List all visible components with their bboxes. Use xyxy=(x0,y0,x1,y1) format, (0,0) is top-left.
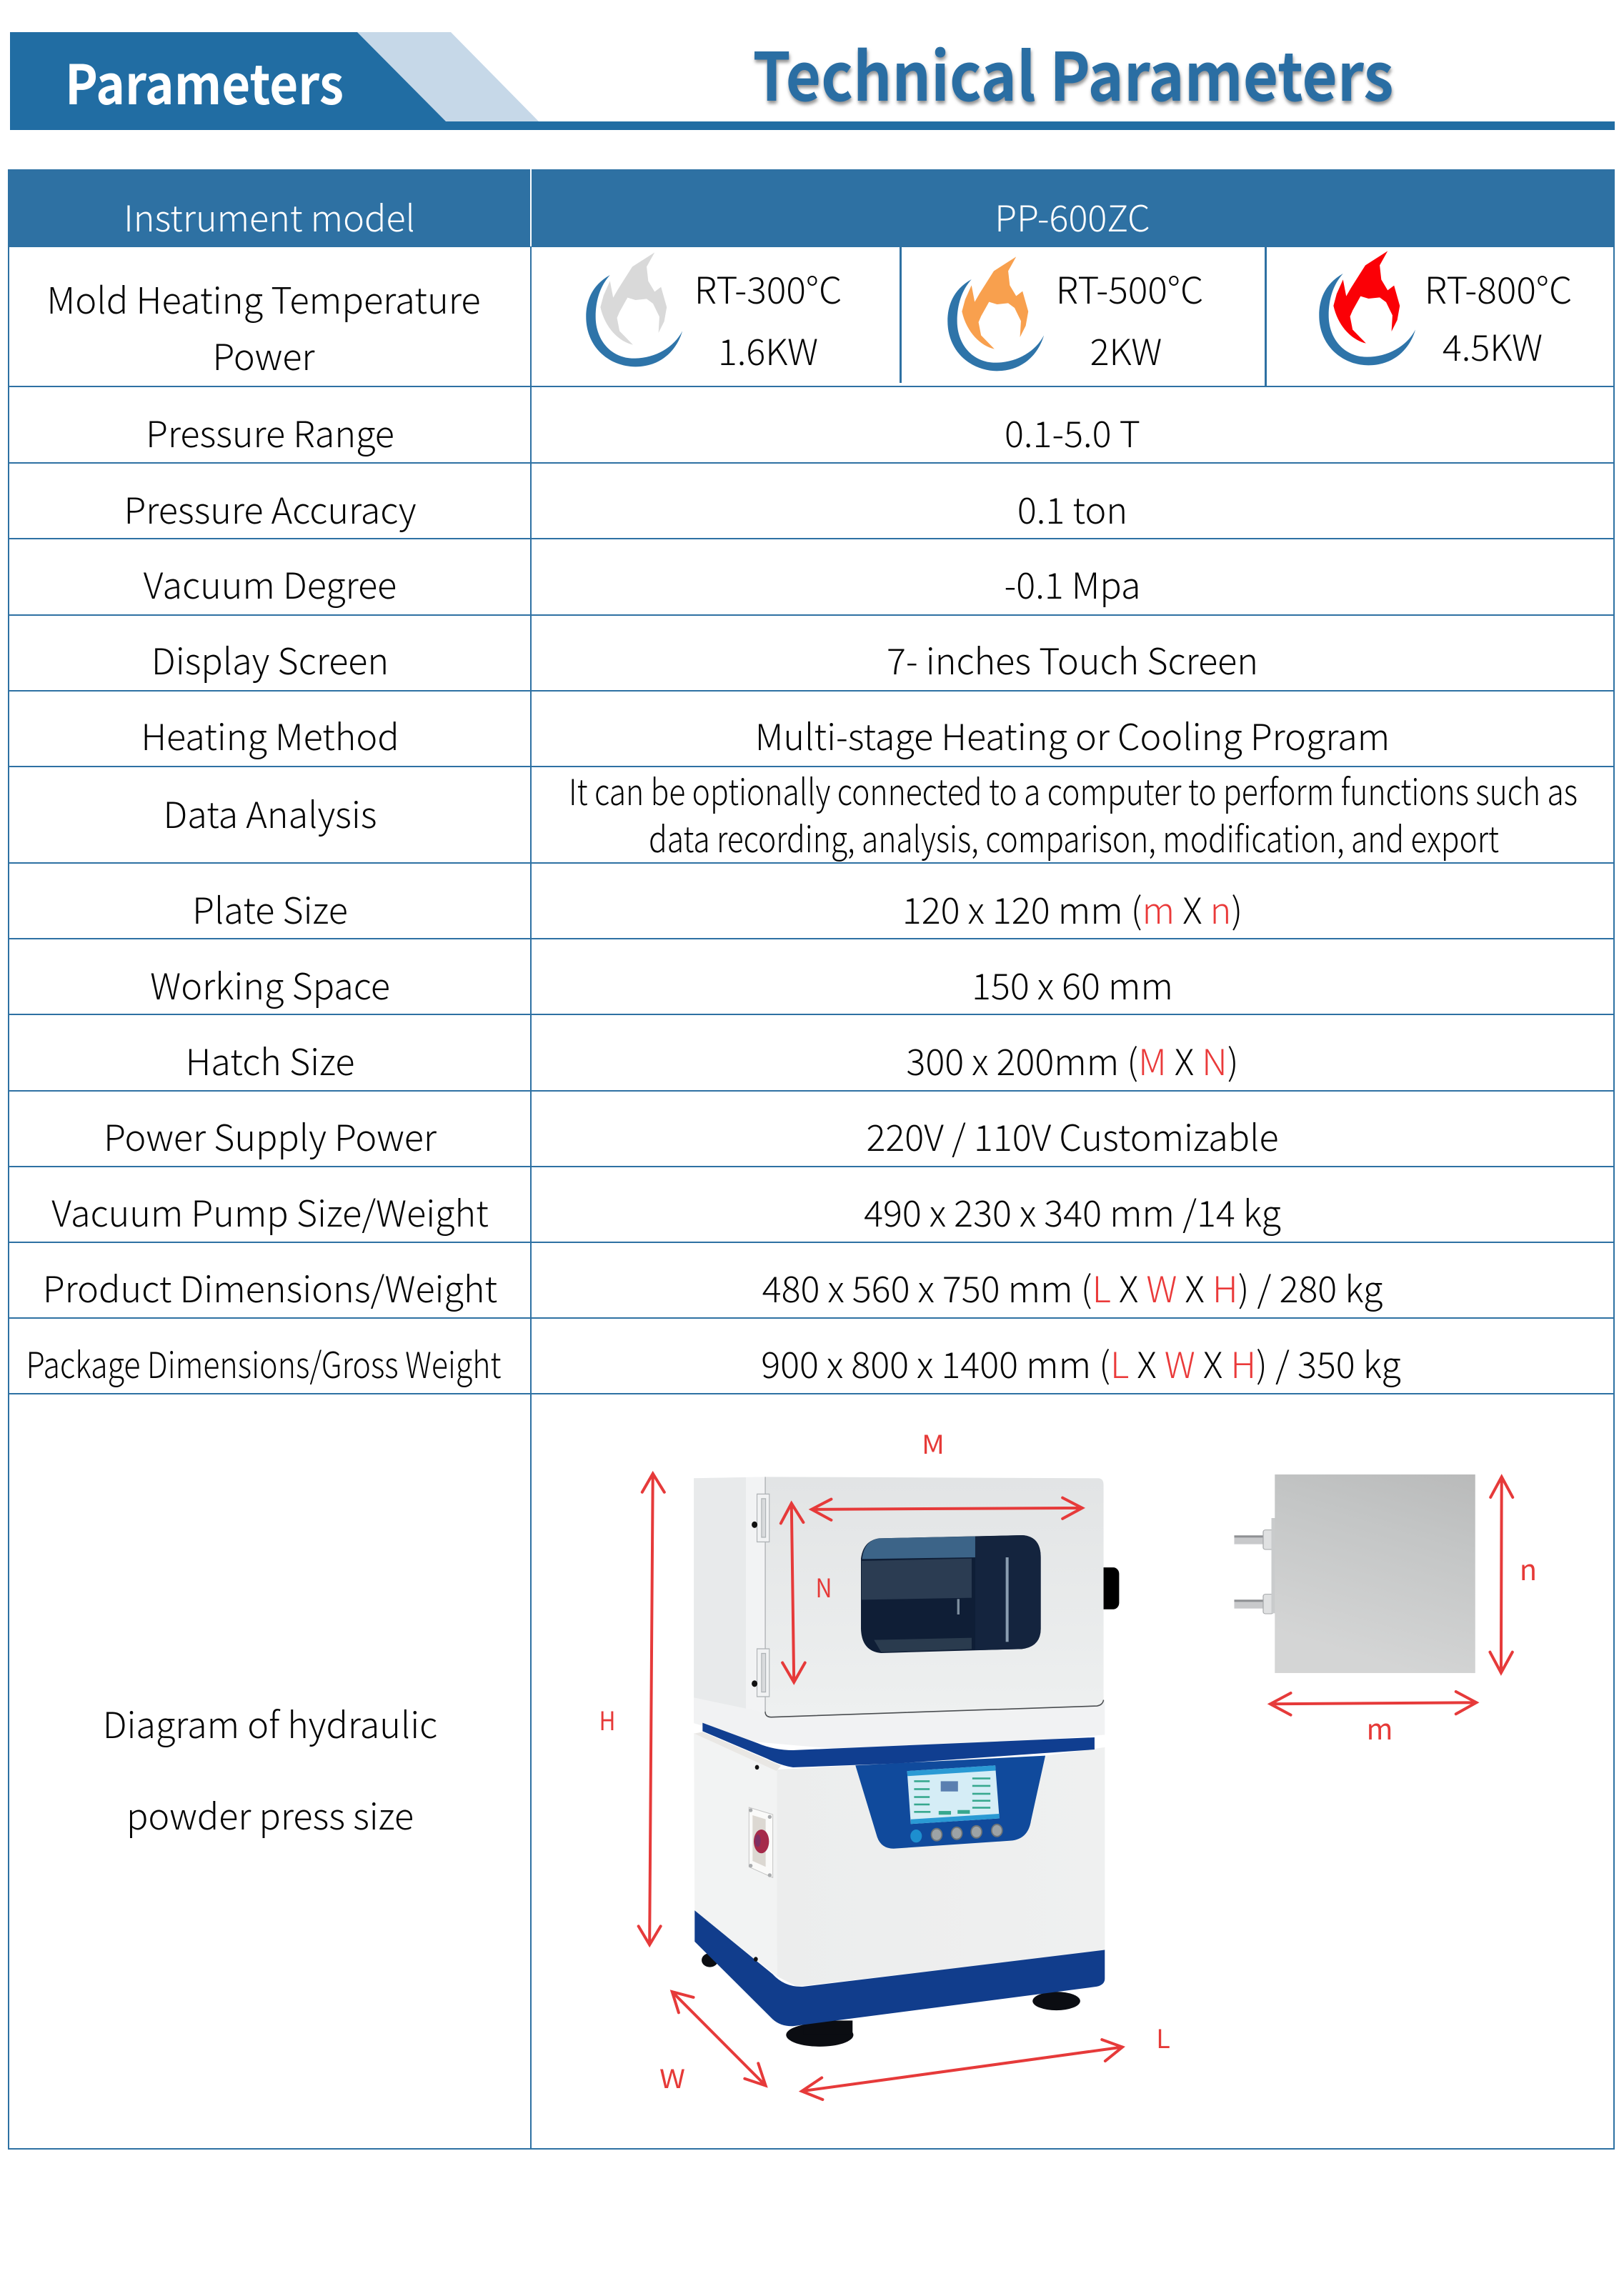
row: vacuum degree: Vacuum Degree xyxy=(144,558,397,609)
table header row: PP-600ZC xyxy=(995,191,1150,242)
arrow: M xyxy=(812,1498,1082,1520)
icon: red flame 800C xyxy=(1319,251,1415,365)
machine lower front xyxy=(777,1747,1105,1987)
row: heating method: Multi-stage Heating or Cooling Program xyxy=(755,709,1390,761)
row: data analysis: Data Analysis xyxy=(163,787,377,839)
table header row xyxy=(8,169,1615,247)
row: display screen xyxy=(151,634,1258,685)
machine handle xyxy=(1095,1567,1119,1609)
diagram: heating plate xyxy=(1234,1474,1537,1748)
row: pressure range: 0.1-5.0 T xyxy=(1005,406,1140,458)
row: working space: Working Space xyxy=(150,959,390,1010)
row: plate size xyxy=(192,883,1242,934)
row: vacuum pump size and weight: Vacuum Pump Size/Weight xyxy=(51,1186,489,1237)
row: product dimensions and weight: Product Dimensions/Weight xyxy=(43,1262,497,1313)
row: package dimensions and gross weight: 900 x 800 x 1400 mm (L X W X H) / 350 kg xyxy=(761,1337,1401,1389)
row: mold heating temperature and power: 4.5KW xyxy=(1443,320,1543,371)
row: mold heating temperature and power: RT-800°C xyxy=(1425,261,1572,314)
row: mold heating temperature and power: Mold Heating Temperature xyxy=(46,271,481,324)
row: working space: 150 x 60 mm xyxy=(972,959,1173,1010)
row: data analysis xyxy=(163,764,1578,863)
machine feet xyxy=(702,1953,1080,2047)
machine control panel xyxy=(855,1756,1045,1849)
icon: grey flame 300C xyxy=(586,252,682,366)
row: power supply power xyxy=(104,1110,1279,1162)
row: pressure accuracy xyxy=(124,483,1127,534)
row: hatch size: Hatch Size xyxy=(186,1034,354,1086)
machine window xyxy=(861,1535,1041,1653)
row: mold heating temperature and power: RT-300°C xyxy=(694,261,842,314)
row: vacuum pump size and weight xyxy=(51,1186,1281,1237)
arrow: n xyxy=(1490,1477,1513,1673)
row: hatch size xyxy=(186,1034,1239,1086)
label: n: n xyxy=(1520,1547,1537,1589)
plate fittings xyxy=(1234,1518,1275,1614)
row: vacuum degree xyxy=(144,558,1140,609)
row: product dimensions and weight xyxy=(43,1262,1383,1313)
header banner xyxy=(10,32,1615,130)
label: m: m xyxy=(1366,1707,1393,1748)
row: vacuum degree: -0.1 Mpa xyxy=(1005,558,1140,609)
row: mold heating temperature and power: Power xyxy=(213,329,315,381)
arrow: W xyxy=(672,1992,766,2085)
row: mold heating temperature and power: 2KW xyxy=(1090,324,1162,376)
label: L: L xyxy=(1156,2019,1170,2056)
label: W: W xyxy=(659,2059,685,2096)
machine blue base xyxy=(694,1910,1105,2026)
row: mold heating temperature and power: RT-500°C xyxy=(1056,261,1203,314)
row: product dimensions and weight: 480 x 560 x 750 mm (L X W X H) / 280 kg xyxy=(762,1262,1383,1313)
row: pressure accuracy: Pressure Accuracy xyxy=(124,483,417,534)
row: vacuum pump size and weight: 490 x 230 x 340 mm /14 kg xyxy=(864,1186,1281,1237)
row: display screen: 7- inches Touch Screen xyxy=(887,634,1258,685)
banner light slanted tab xyxy=(350,32,539,123)
plate body xyxy=(1275,1474,1475,1673)
row: heating method xyxy=(141,709,1390,761)
label: M: M xyxy=(922,1424,945,1462)
row: display screen: Display Screen xyxy=(151,634,389,685)
label: H: H xyxy=(599,1701,616,1738)
arrow: H xyxy=(639,1474,664,1945)
machine lower side rim xyxy=(694,1732,781,1771)
row: mold heating temperature and power: 1.6KW xyxy=(718,324,818,376)
banner dark tab xyxy=(10,32,457,130)
row label: diagram of hydraulic powder press size xyxy=(103,1697,437,1840)
title: Technical Parameters xyxy=(753,24,1393,120)
machine lower side xyxy=(694,1733,779,1977)
row: heating method: Heating Method xyxy=(141,709,399,761)
machine hinges xyxy=(757,1494,769,1697)
row: plate size: 120 x 120 mm (m X n) xyxy=(902,883,1242,934)
row: pressure accuracy: 0.1 ton xyxy=(1017,483,1127,534)
row: package dimensions and gross weight xyxy=(26,1337,1401,1389)
banner heading: Parameters xyxy=(65,41,344,120)
row: working space xyxy=(150,959,1173,1010)
row: mold heating temperature and power xyxy=(46,251,1572,381)
machine emergency stop xyxy=(749,1807,773,1877)
row label: diagram of hydraulic powder press size: Diagram of hydraulic xyxy=(103,1697,437,1749)
row: plate size: Plate Size xyxy=(192,883,348,934)
arrow: N xyxy=(781,1503,805,1682)
table header row: Instrument model xyxy=(124,191,415,242)
arrow: m xyxy=(1270,1692,1476,1715)
row: pressure range xyxy=(146,406,1140,458)
arrow: L xyxy=(802,2040,1122,2100)
row: hatch size: 300 x 200mm (M X N) xyxy=(906,1034,1239,1086)
icon: orange flame 500C xyxy=(947,256,1044,371)
row: power supply power: Power Supply Power xyxy=(104,1110,437,1162)
diagram: powder press machine xyxy=(599,1424,1170,2100)
machine upper body xyxy=(694,1477,764,1721)
banner underline xyxy=(446,121,1615,130)
label: N: N xyxy=(816,1568,832,1605)
row: package dimensions and gross weight: Package Dimensions/Gross Weight xyxy=(26,1337,502,1389)
row: pressure range: Pressure Range xyxy=(146,406,394,458)
row: power supply power: 220V / 110V Customizable xyxy=(866,1110,1279,1162)
row label: diagram of hydraulic powder press size: powder press size xyxy=(126,1789,414,1840)
machine blue slab xyxy=(694,1723,1095,1771)
